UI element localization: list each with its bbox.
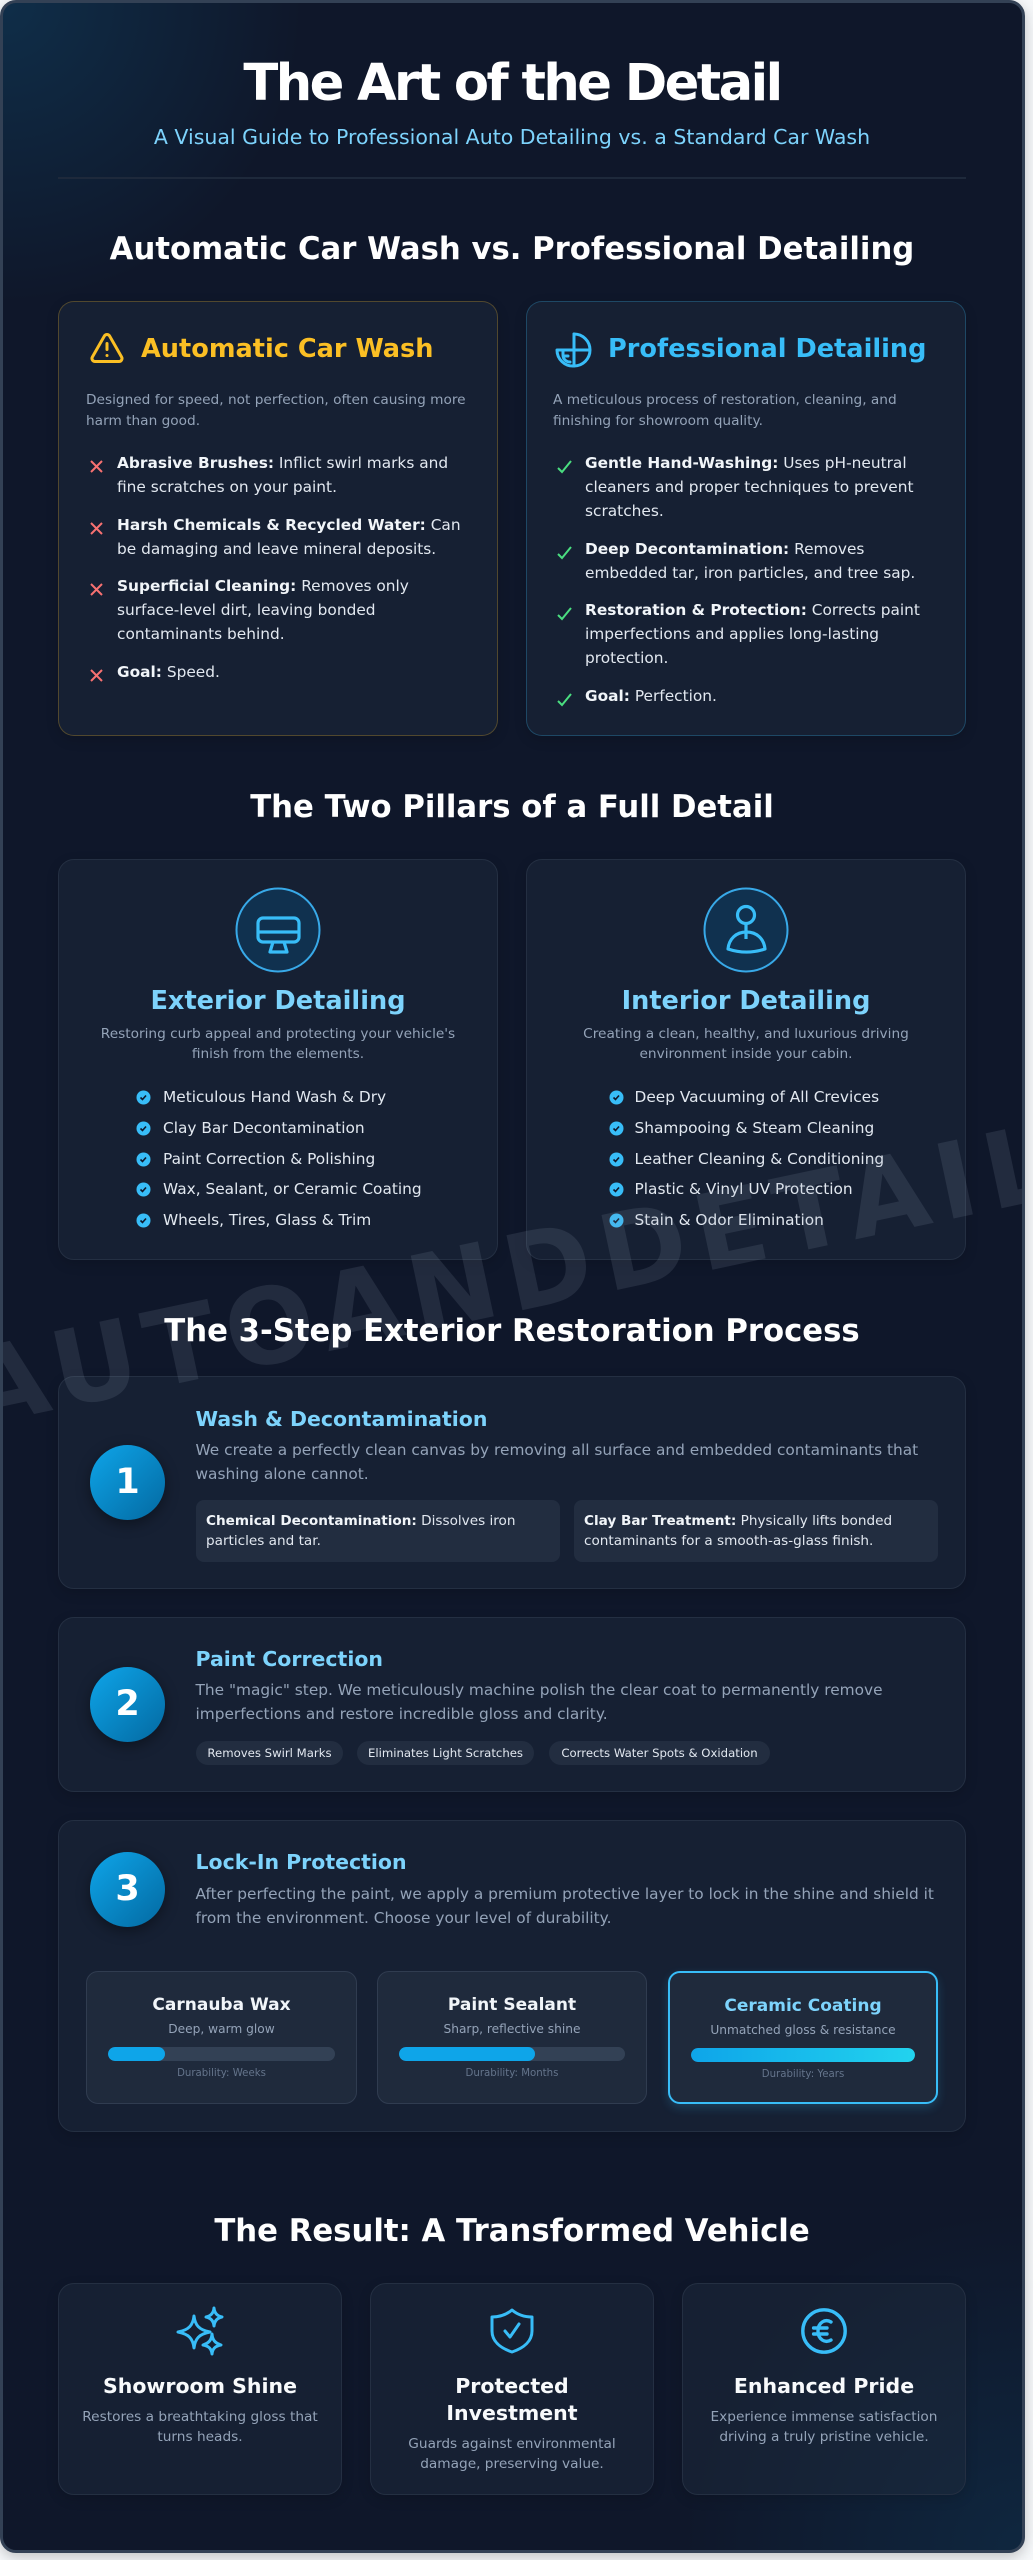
list item: deep decontamination: Deep Decontamination: Removes — [585, 540, 864, 558]
text: automatic description: Designed for speed, not perfection, often causing more — [86, 392, 466, 408]
heading: interior detailing: Interior Detailing — [622, 986, 870, 1016]
durability bar — [691, 2048, 915, 2062]
text: step 2 description: The "magic" step. We meticulously machine polish the clear coat to permanently remove — [196, 1681, 883, 1699]
option title: Paint Sealant — [448, 1995, 576, 2015]
heading: step 1: Wash & Decontamination — [196, 1407, 487, 1431]
list: exterior services — [136, 1088, 422, 1229]
text: professional description: A meticulous process of restoration, cleaning, and — [553, 392, 897, 408]
heading: comparison: Automatic Car Wash vs. Professional Detailing — [110, 231, 914, 267]
icon: euro coin — [801, 2308, 847, 2354]
list item: gentle hand-washing: cleaners and proper techniques to prevent — [585, 478, 914, 496]
icon: professional emblem — [556, 332, 592, 368]
text: step 3 description: from the environment. Choose your level of durability. — [196, 1909, 611, 1927]
panel: step 2 — [58, 1617, 966, 1792]
list item: Shampooing & Steam Cleaning — [634, 1119, 874, 1137]
callout: clay bar treatment: contaminants for a smooth-as-glass finish. — [584, 1533, 873, 1549]
list item: abrasive brushes — [117, 454, 448, 496]
list item: harsh chemicals — [117, 516, 461, 558]
list item: harsh chemicals: be damaging and leave mineral deposits. — [117, 540, 436, 558]
icon: cross — [90, 583, 103, 596]
panel: automatic car wash — [58, 301, 498, 736]
icons: check bullets — [610, 1090, 624, 1228]
text: step 1 description: washing alone cannot. — [196, 1465, 369, 1483]
text: protected description: Guards against environmental — [408, 2436, 616, 2452]
text: step 1 description: We create a perfectly clean canvas by removing all surface and embedded contaminants that — [196, 1441, 918, 1459]
text: interior description: Creating a clean, healthy, and luxurious driving — [583, 1026, 909, 1042]
text: step 3 description: After perfecting the paint, we apply a premium protective layer to lock in the shine and shield it — [196, 1885, 934, 1903]
heading: step 2: Paint Correction — [196, 1647, 383, 1671]
icon: monitor in circle — [236, 888, 320, 972]
text: enhanced pride description: driving a truly pristine vehicle. — [719, 2429, 929, 2445]
text: exterior description — [101, 1026, 455, 1062]
durability bar — [399, 2047, 625, 2061]
heading: exterior detailing: Exterior Detailing — [150, 986, 406, 1016]
tag: eliminates light scratches — [357, 1741, 534, 1765]
option title: Carnauba Wax — [152, 1995, 291, 2015]
tag: removes swirl marks — [196, 1741, 343, 1765]
option description: Deep, warm glow — [168, 2022, 275, 2036]
heading: automatic car wash: Automatic Car Wash — [141, 334, 434, 364]
list item: goal perfection: Goal: Perfection. — [585, 687, 717, 705]
tag: corrects water spots — [549, 1741, 770, 1765]
panel: professional detailing — [526, 301, 966, 736]
icon: person in circle — [704, 888, 788, 972]
icon: check — [557, 546, 572, 560]
heading: three-step process: The 3-Step Exterior Restoration Process — [164, 1313, 860, 1349]
durability bar — [108, 2047, 335, 2061]
list item: superficial cleaning: Superficial Cleaning: Removes only — [117, 577, 409, 595]
heading: step 3: Lock-In Protection — [196, 1850, 407, 1874]
tag: corrects water spots: Corrects Water Spots & Oxidation — [561, 1746, 758, 1760]
text: step 2 description — [195, 1681, 883, 1723]
step number 3: 3 — [115, 1869, 140, 1909]
heading: protected investment — [446, 2374, 578, 2425]
icon: check — [557, 693, 572, 706]
panel: paint sealant — [377, 1971, 647, 2104]
step number 1 — [90, 1445, 165, 1520]
icon: shield check — [490, 2308, 534, 2354]
list item: deep decontamination — [585, 540, 915, 582]
icon: sparkles — [176, 2306, 224, 2356]
list item: abrasive brushes: fine scratches on your paint. — [117, 478, 337, 496]
panel: protected investment — [370, 2283, 654, 2495]
list item: Stain & Odor Elimination — [634, 1211, 824, 1229]
callout: chemical decontamination — [196, 1500, 560, 1562]
panel: enhanced pride — [682, 2283, 966, 2495]
text: protected description — [408, 2436, 616, 2472]
icon: cross — [90, 669, 103, 682]
list item: Clay Bar Decontamination — [163, 1119, 365, 1137]
text: showroom description — [82, 2409, 318, 2445]
list item: gentle hand-washing: scratches. — [585, 502, 664, 520]
text: showroom description: Restores a breathtaking gloss that — [82, 2409, 318, 2425]
step number 1: 1 — [115, 1462, 140, 1502]
heading: showroom shine: Showroom Shine — [103, 2374, 297, 2398]
list item: superficial cleaning: contaminants behind. — [117, 625, 285, 643]
list item: goal speed: Goal: Speed. — [117, 663, 220, 681]
heading: protected investment: Protected — [455, 2374, 569, 2398]
subtitle: A Visual Guide to Professional Auto Detailing vs. a Standard Car Wash — [154, 125, 870, 149]
text: professional description — [553, 392, 897, 429]
list: interior services — [610, 1088, 884, 1229]
list item: Leather Cleaning & Conditioning — [634, 1150, 884, 1168]
list item: superficial cleaning — [117, 577, 409, 643]
list item: deep decontamination: embedded tar, iron particles, and tree sap. — [585, 564, 915, 582]
list item: Paint Correction & Polishing — [163, 1150, 375, 1168]
text: exterior description: Restoring curb appeal and protecting your vehicle's — [101, 1026, 455, 1042]
list item: Wax, Sealant, or Ceramic Coating — [163, 1180, 422, 1198]
tag: eliminates light scratches: Eliminates Light Scratches — [368, 1746, 523, 1760]
option description: Unmatched gloss & resistance — [710, 2023, 896, 2037]
panel: exterior detailing — [58, 859, 498, 1260]
icon: check — [557, 607, 572, 620]
text: interior description — [583, 1026, 909, 1062]
list item: harsh chemicals: Harsh Chemicals & Recycled Water: Can — [117, 516, 461, 534]
panel: ceramic coating — [668, 1971, 938, 2104]
panel: interior detailing — [526, 859, 966, 1260]
list item: abrasive brushes: Abrasive Brushes: Inflict swirl marks and — [117, 454, 448, 472]
text: step 1 description — [196, 1441, 918, 1483]
list item: gentle hand-washing: Gentle Hand-Washing: Uses pH-neutral — [585, 454, 907, 472]
step number 2 — [90, 1667, 165, 1742]
list item: gentle hand-washing — [585, 454, 914, 520]
heading: two pillars: The Two Pillars of a Full Detail — [250, 789, 774, 825]
icon: check — [557, 460, 572, 474]
list item: restoration and protection: protection. — [585, 649, 668, 667]
callout: chemical decontamination: Chemical Decontamination: Dissolves iron — [206, 1512, 516, 1528]
option title: Ceramic Coating — [724, 1996, 882, 2016]
callout: clay bar treatment — [574, 1500, 938, 1562]
list item: Meticulous Hand Wash & Dry — [163, 1088, 386, 1106]
heading: protected investment: Investment — [446, 2401, 578, 2425]
callout: chemical decontamination: particles and tar. — [206, 1533, 321, 1549]
panel: carnauba wax — [86, 1971, 357, 2104]
text: automatic description — [86, 392, 466, 429]
text: exterior description: finish from the elements. — [192, 1046, 364, 1062]
callout: clay bar treatment: Clay Bar Treatment: Physically lifts bonded — [584, 1512, 892, 1528]
icons: check bullets — [136, 1090, 150, 1228]
durability label: Durability: Weeks — [177, 2068, 266, 2079]
text: enhanced pride description — [711, 2409, 937, 2445]
list item: restoration and protection: imperfections and applies long-lasting — [585, 625, 879, 643]
icon: cross — [90, 460, 103, 473]
tag: removes swirl marks: Removes Swirl Marks — [207, 1746, 332, 1760]
panel: step 3 — [58, 1820, 966, 2132]
panel: showroom shine — [58, 2283, 342, 2495]
list item: restoration and protection: Restoration & Protection: Corrects paint — [585, 601, 920, 619]
heading: professional detailing: Professional Detailing — [608, 334, 926, 364]
text: step 2 description: imperfections and restore incredible gloss and clarity. — [196, 1705, 608, 1723]
durability label: Durability: Years — [762, 2069, 844, 2080]
list item: Deep Vacuuming of All Crevices — [634, 1088, 879, 1106]
list item: Plastic & Vinyl UV Protection — [634, 1180, 853, 1198]
text: professional description: finishing for showroom quality. — [553, 413, 763, 429]
list item: superficial cleaning: surface-level dirt, leaving bonded — [117, 601, 376, 619]
text: enhanced pride description: Experience immense satisfaction — [711, 2409, 937, 2425]
text: step 3 description — [196, 1885, 934, 1927]
panel: step 1 — [58, 1376, 966, 1589]
step number 3 — [90, 1852, 165, 1927]
icon: cross — [90, 522, 103, 535]
step number 2: 2 — [115, 1684, 140, 1724]
text: interior description: environment inside your cabin. — [640, 1046, 852, 1062]
text: protected description: damage, preserving value. — [420, 2456, 604, 2472]
text: automatic description: harm than good. — [86, 413, 200, 429]
icon: warning triangle — [90, 333, 124, 363]
durability label: Durability: Months — [466, 2068, 558, 2079]
heading: enhanced pride: Enhanced Pride — [734, 2374, 914, 2398]
list item: restoration and protection — [585, 601, 920, 667]
heading: the result: The Result: A Transformed Vehicle — [214, 2213, 810, 2249]
list item: Wheels, Tires, Glass & Trim — [163, 1211, 371, 1229]
option description: Sharp, reflective shine — [444, 2022, 580, 2036]
text: showroom description: turns heads. — [157, 2429, 243, 2445]
title: The Art of the Detail — [243, 53, 781, 113]
